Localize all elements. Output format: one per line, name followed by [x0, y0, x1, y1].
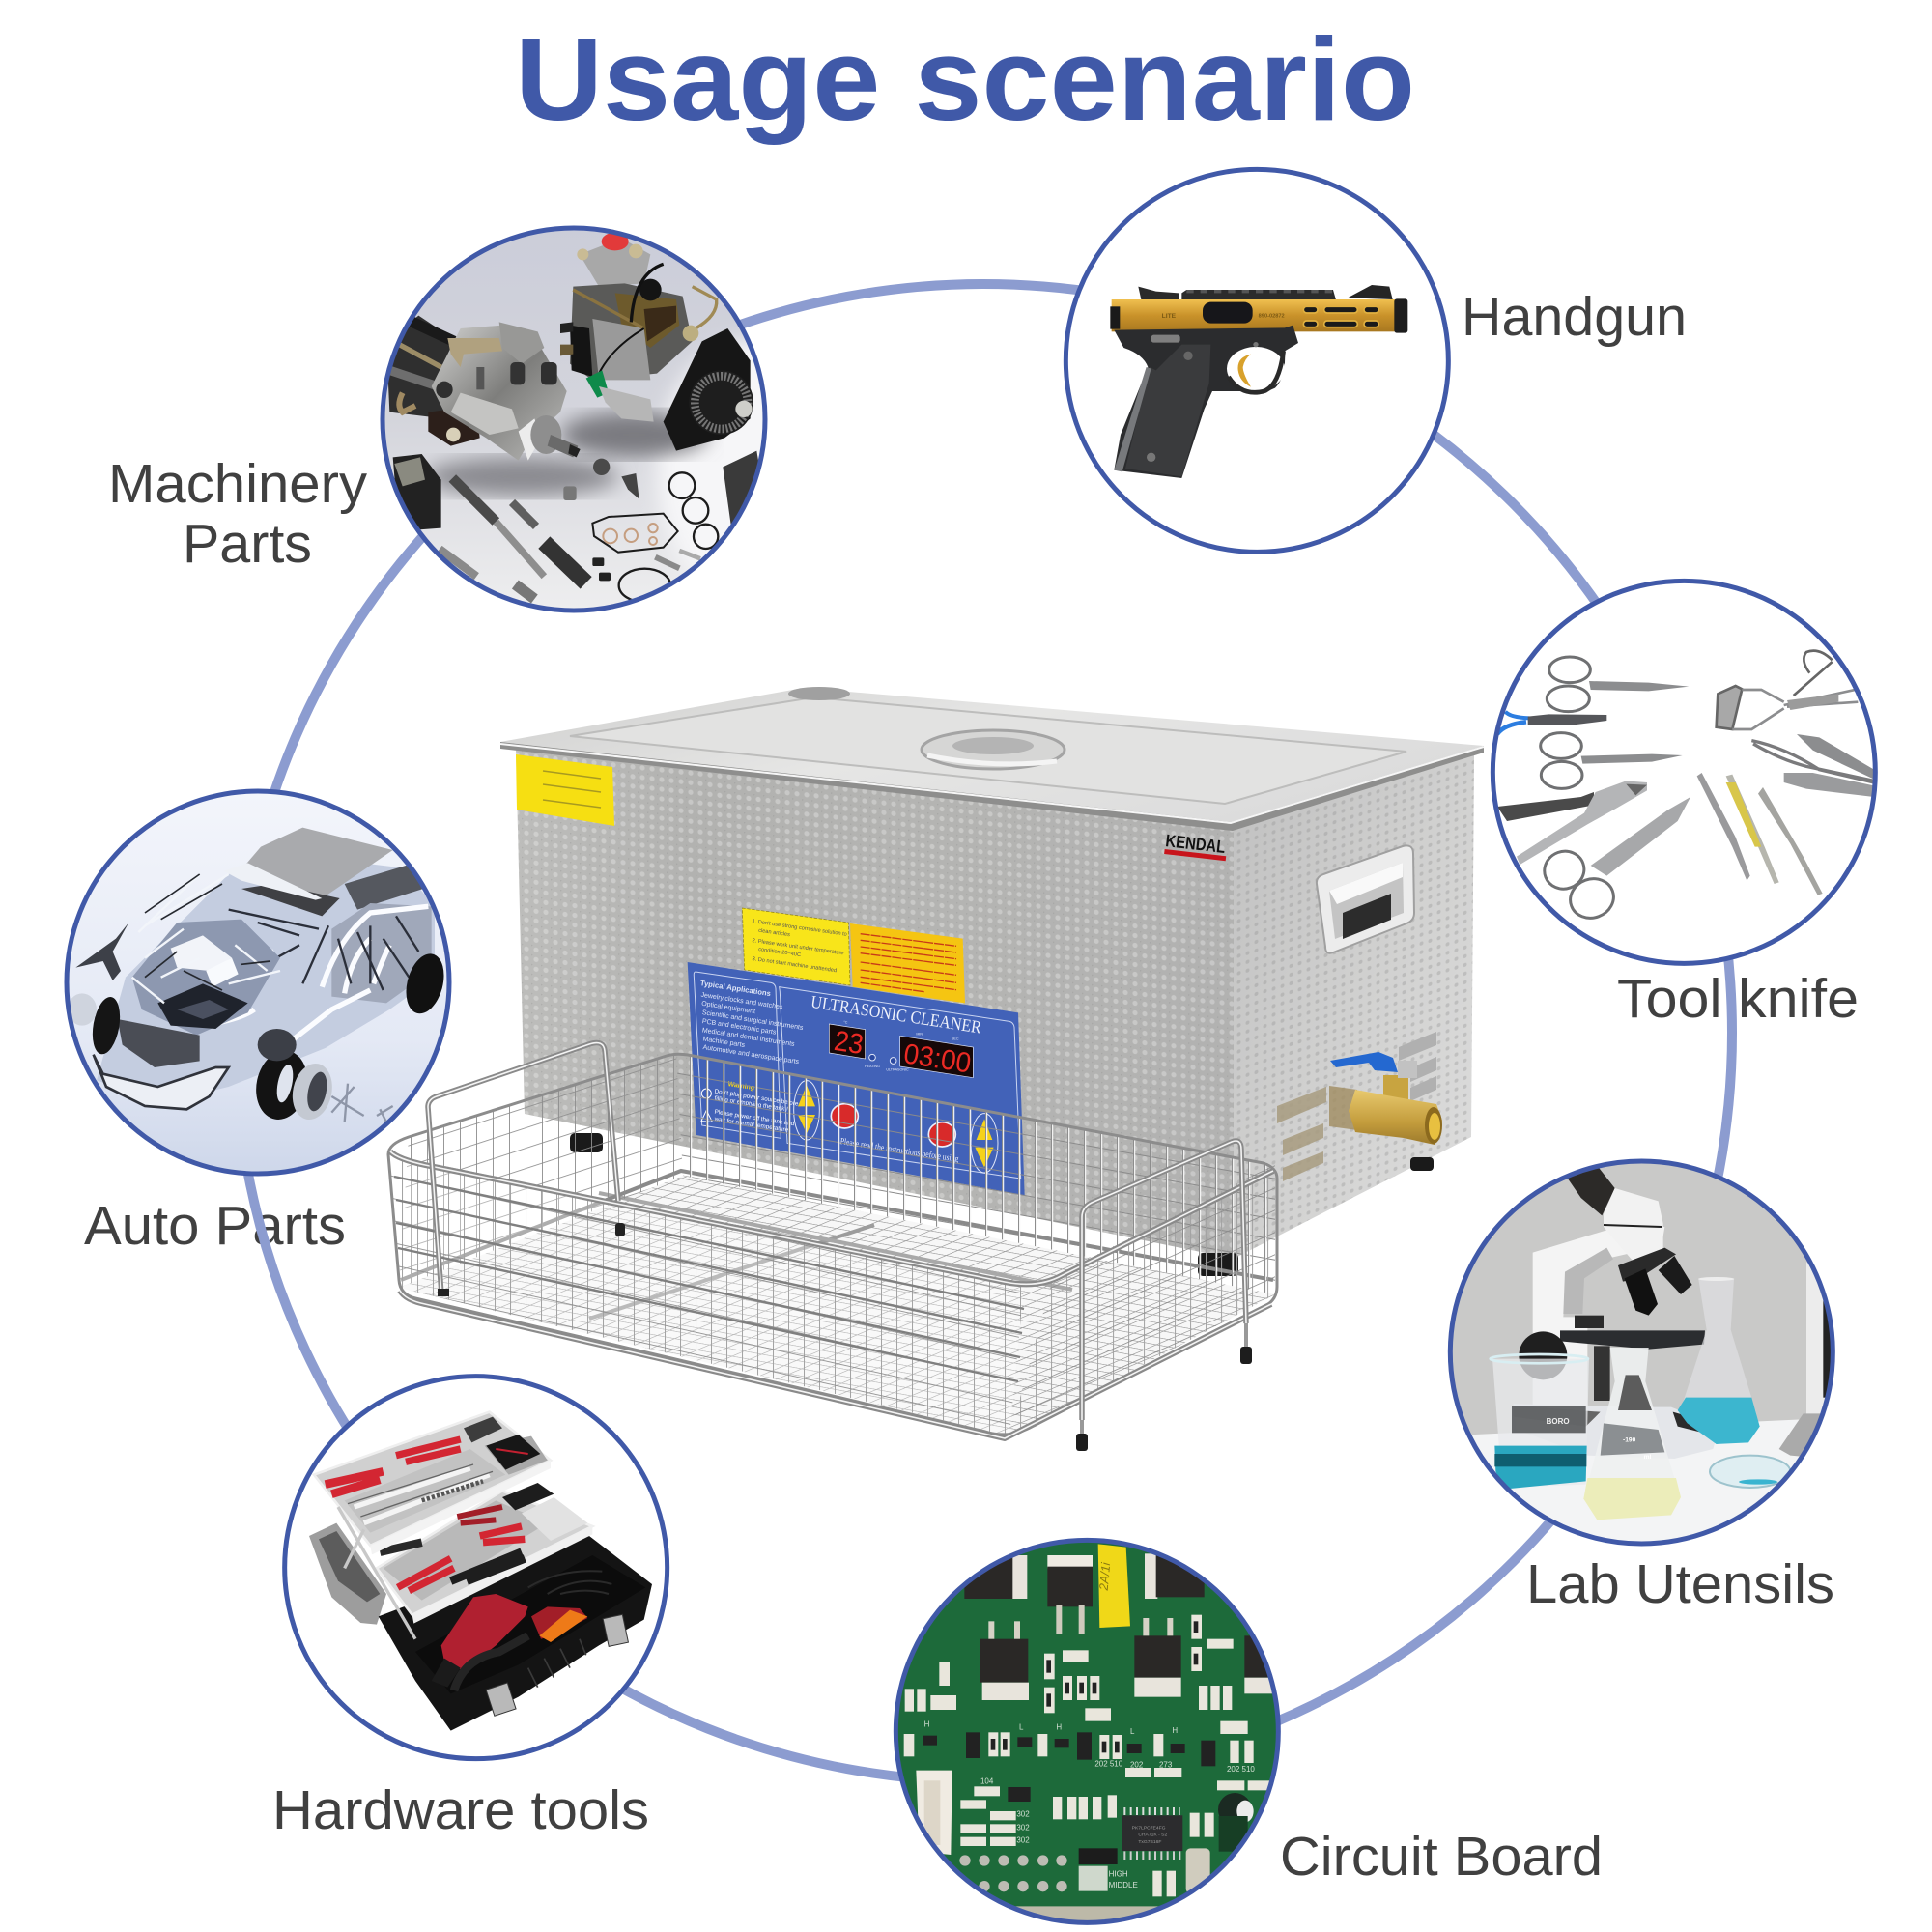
engine — [132, 920, 280, 1036]
timer display: 03:00 — [901, 1037, 973, 1080]
yellow sticker instructions: 1. Don't use strong corrosive solution to — [752, 919, 847, 938]
applications box: Jewelry,clocks and watches — [700, 992, 783, 1011]
toolbox — [309, 1412, 652, 1731]
warning text: Don't plug power source before — [714, 1088, 799, 1108]
middle transistors — [980, 1618, 1273, 1700]
board silk text: L — [1019, 1723, 1024, 1732]
yellow capacitor — [1097, 1544, 1130, 1628]
circle: circuit board — [895, 1540, 1278, 1932]
basket rims — [388, 1054, 1277, 1438]
tank side face — [1234, 755, 1474, 1259]
temperature buttons — [794, 1081, 819, 1140]
label: Circuit Board: Circuit Board — [1280, 1826, 1603, 1888]
applications box: Medical and dental instruments — [701, 1027, 795, 1048]
controller chip: TxG7B16F — [1138, 1839, 1161, 1845]
basket handle left — [428, 1043, 618, 1294]
warning text — [701, 1081, 799, 1134]
warning text: Please power off the tank and — [714, 1109, 795, 1127]
jumper block — [1079, 1848, 1138, 1891]
applications box — [694, 972, 804, 1138]
indicator lamps — [869, 1054, 896, 1064]
title: Usage scenario — [515, 14, 1415, 145]
board silk text: H — [1056, 1723, 1062, 1732]
wire basket — [388, 1043, 1277, 1451]
indicator captions: ULTRASONIC — [886, 1067, 909, 1071]
solder joints — [959, 1855, 1067, 1891]
small components — [904, 1615, 1270, 1896]
board silk text: L — [1130, 1727, 1135, 1736]
right pump — [560, 233, 717, 422]
label: Hardware tools: Hardware tools — [272, 1779, 649, 1841]
label: Handgun: Handgun — [1462, 286, 1687, 348]
upper tray — [314, 1412, 551, 1546]
yellow sticker instructions — [742, 908, 965, 1003]
center flask: -190 — [1623, 1437, 1636, 1444]
indicator captions: SEC — [952, 1037, 959, 1041]
board silk text: 202 510 — [1227, 1765, 1255, 1774]
yellow sticker instructions: 3. Do not start machine unattended — [752, 956, 837, 974]
objectives — [1618, 1248, 1692, 1316]
small parts — [393, 451, 763, 602]
gear — [664, 328, 753, 451]
crystal and capacitor — [1186, 1793, 1254, 1893]
temperature display: 23 — [832, 1025, 866, 1061]
indicator captions: MIN — [916, 1033, 923, 1037]
board silk text: 302 — [1016, 1810, 1030, 1819]
connecting ring — [235, 284, 1732, 1781]
control panel — [688, 962, 1025, 1195]
lid — [500, 687, 1484, 831]
beaker: BORO — [1547, 1417, 1570, 1426]
controller chip — [1122, 1811, 1182, 1856]
board silk text: 202 — [1130, 1760, 1144, 1769]
board silk text: H — [924, 1719, 930, 1728]
circle: machinery parts — [381, 226, 767, 612]
indicator captions: HEATING — [865, 1065, 880, 1068]
lower tray — [377, 1491, 592, 1615]
indicator captions: °C — [843, 1020, 848, 1024]
yellow sticker instructions: condition 20~40C — [758, 947, 801, 958]
right flask — [1678, 1277, 1760, 1444]
blue nippers — [1497, 712, 1606, 734]
applications box: Machine parts — [702, 1036, 746, 1049]
basket left wall — [399, 1053, 683, 1288]
yellow sticker instructions: clean articles — [758, 928, 790, 938]
pistol: LITE — [1162, 313, 1177, 320]
heating button — [831, 1104, 858, 1128]
label: Lab Utensils: Lab Utensils — [1526, 1553, 1834, 1615]
board silk text — [924, 1719, 1255, 1844]
yellow sticker instructions: 2. Please work unit under temperature — [752, 938, 844, 956]
side window — [1779, 1262, 1831, 1457]
board silk text: 302 — [1016, 1835, 1030, 1844]
board silk text: H — [1172, 1726, 1178, 1735]
tweezers — [1697, 773, 1823, 895]
jumper block: HIGH — [1109, 1870, 1128, 1879]
warning text: wait for normal temperature — [713, 1116, 789, 1134]
circle: handgun — [1065, 169, 1448, 552]
microscope arm — [1533, 1166, 1664, 1407]
handle — [1317, 845, 1414, 953]
component bodies — [923, 1621, 1215, 1802]
beaker — [1491, 1354, 1589, 1490]
jumper block: MIDDLE — [1109, 1881, 1138, 1889]
indicator captions — [843, 1020, 959, 1071]
basket right wall — [1009, 1164, 1275, 1436]
table — [1472, 1420, 1799, 1542]
pistol — [1110, 285, 1407, 478]
box base — [379, 1536, 652, 1731]
left tray — [309, 1523, 386, 1625]
center flask: ml — [1644, 1454, 1652, 1461]
controller chip: CHA71K - S2 — [1138, 1833, 1167, 1838]
cutter — [1497, 781, 1647, 865]
label: Tool knife: Tool knife — [1617, 968, 1859, 1030]
loose parts — [331, 1084, 393, 1122]
applications box: PCB and electronic parts — [701, 1018, 777, 1037]
warning text: filling or emptying the tank ! — [714, 1095, 788, 1113]
board silk text: 273 — [1159, 1760, 1173, 1769]
drain valve — [1329, 1052, 1442, 1145]
pistol: 890-02872 — [1259, 314, 1285, 320]
grille and bumper — [118, 1019, 200, 1067]
drill — [441, 1594, 528, 1671]
circle: auto parts — [67, 791, 450, 1174]
board silk text: 302 — [1016, 1824, 1030, 1833]
eyelash curler — [1717, 651, 1858, 729]
scissors — [1539, 657, 1690, 924]
basket front wall — [388, 1154, 1024, 1436]
yellow capacitor: 2A/1i — [1097, 1561, 1113, 1592]
basket back wall — [676, 1053, 1275, 1294]
circle: tool knives — [1492, 581, 1875, 963]
applications box: Typical Applications — [699, 979, 771, 998]
left pump — [386, 316, 581, 461]
controller chip: PK7LPC7E4FG — [1132, 1825, 1166, 1831]
warning text: Warning — [727, 1081, 754, 1092]
center flask — [1583, 1348, 1681, 1520]
panel footer text: Please read the instructions before using — [839, 1136, 959, 1165]
circle: hardware tools — [285, 1377, 668, 1759]
KENDAL logo: KENDAL — [1165, 831, 1226, 857]
board silk text: 202 510 — [1094, 1759, 1123, 1768]
white connector — [916, 1771, 952, 1855]
louvers upper — [1399, 1032, 1436, 1101]
applications box: Scientific and surgical instruments — [701, 1009, 804, 1032]
label: Machinery Parts — [108, 453, 368, 575]
label: Machinery Parts: Machinery — [108, 453, 368, 515]
ultrasonic button — [928, 1122, 955, 1147]
warning sticker left — [516, 754, 614, 826]
louvers lower — [1277, 1087, 1326, 1181]
board silk text: 104 — [980, 1777, 994, 1786]
label: Machinery Parts: Parts — [183, 513, 312, 575]
tank front face — [516, 748, 1234, 1259]
basket floor — [399, 1171, 1275, 1436]
applications box: Automotive and aerospace parts — [702, 1044, 800, 1065]
timer buttons — [971, 1114, 998, 1173]
stage — [1519, 1316, 1705, 1401]
petri dish — [1710, 1456, 1790, 1488]
forceps — [1751, 734, 1874, 797]
label: Auto Parts: Auto Parts — [84, 1195, 346, 1257]
tank feet — [570, 1133, 1434, 1276]
circle: lab utensils — [1447, 1159, 1835, 1546]
car body — [75, 828, 435, 1109]
top transistors — [964, 1553, 1205, 1634]
basket handle right — [1082, 1141, 1246, 1420]
latches — [486, 1614, 628, 1716]
fender — [75, 923, 128, 980]
panel title: ULTRASONIC CLEANER — [810, 992, 983, 1037]
basket feet — [438, 1223, 1252, 1451]
microscope base — [1514, 1404, 1719, 1459]
ultrasonic cleaner product — [388, 687, 1484, 1451]
wheels — [68, 950, 450, 1124]
applications box: Optical equipment — [701, 1001, 755, 1015]
